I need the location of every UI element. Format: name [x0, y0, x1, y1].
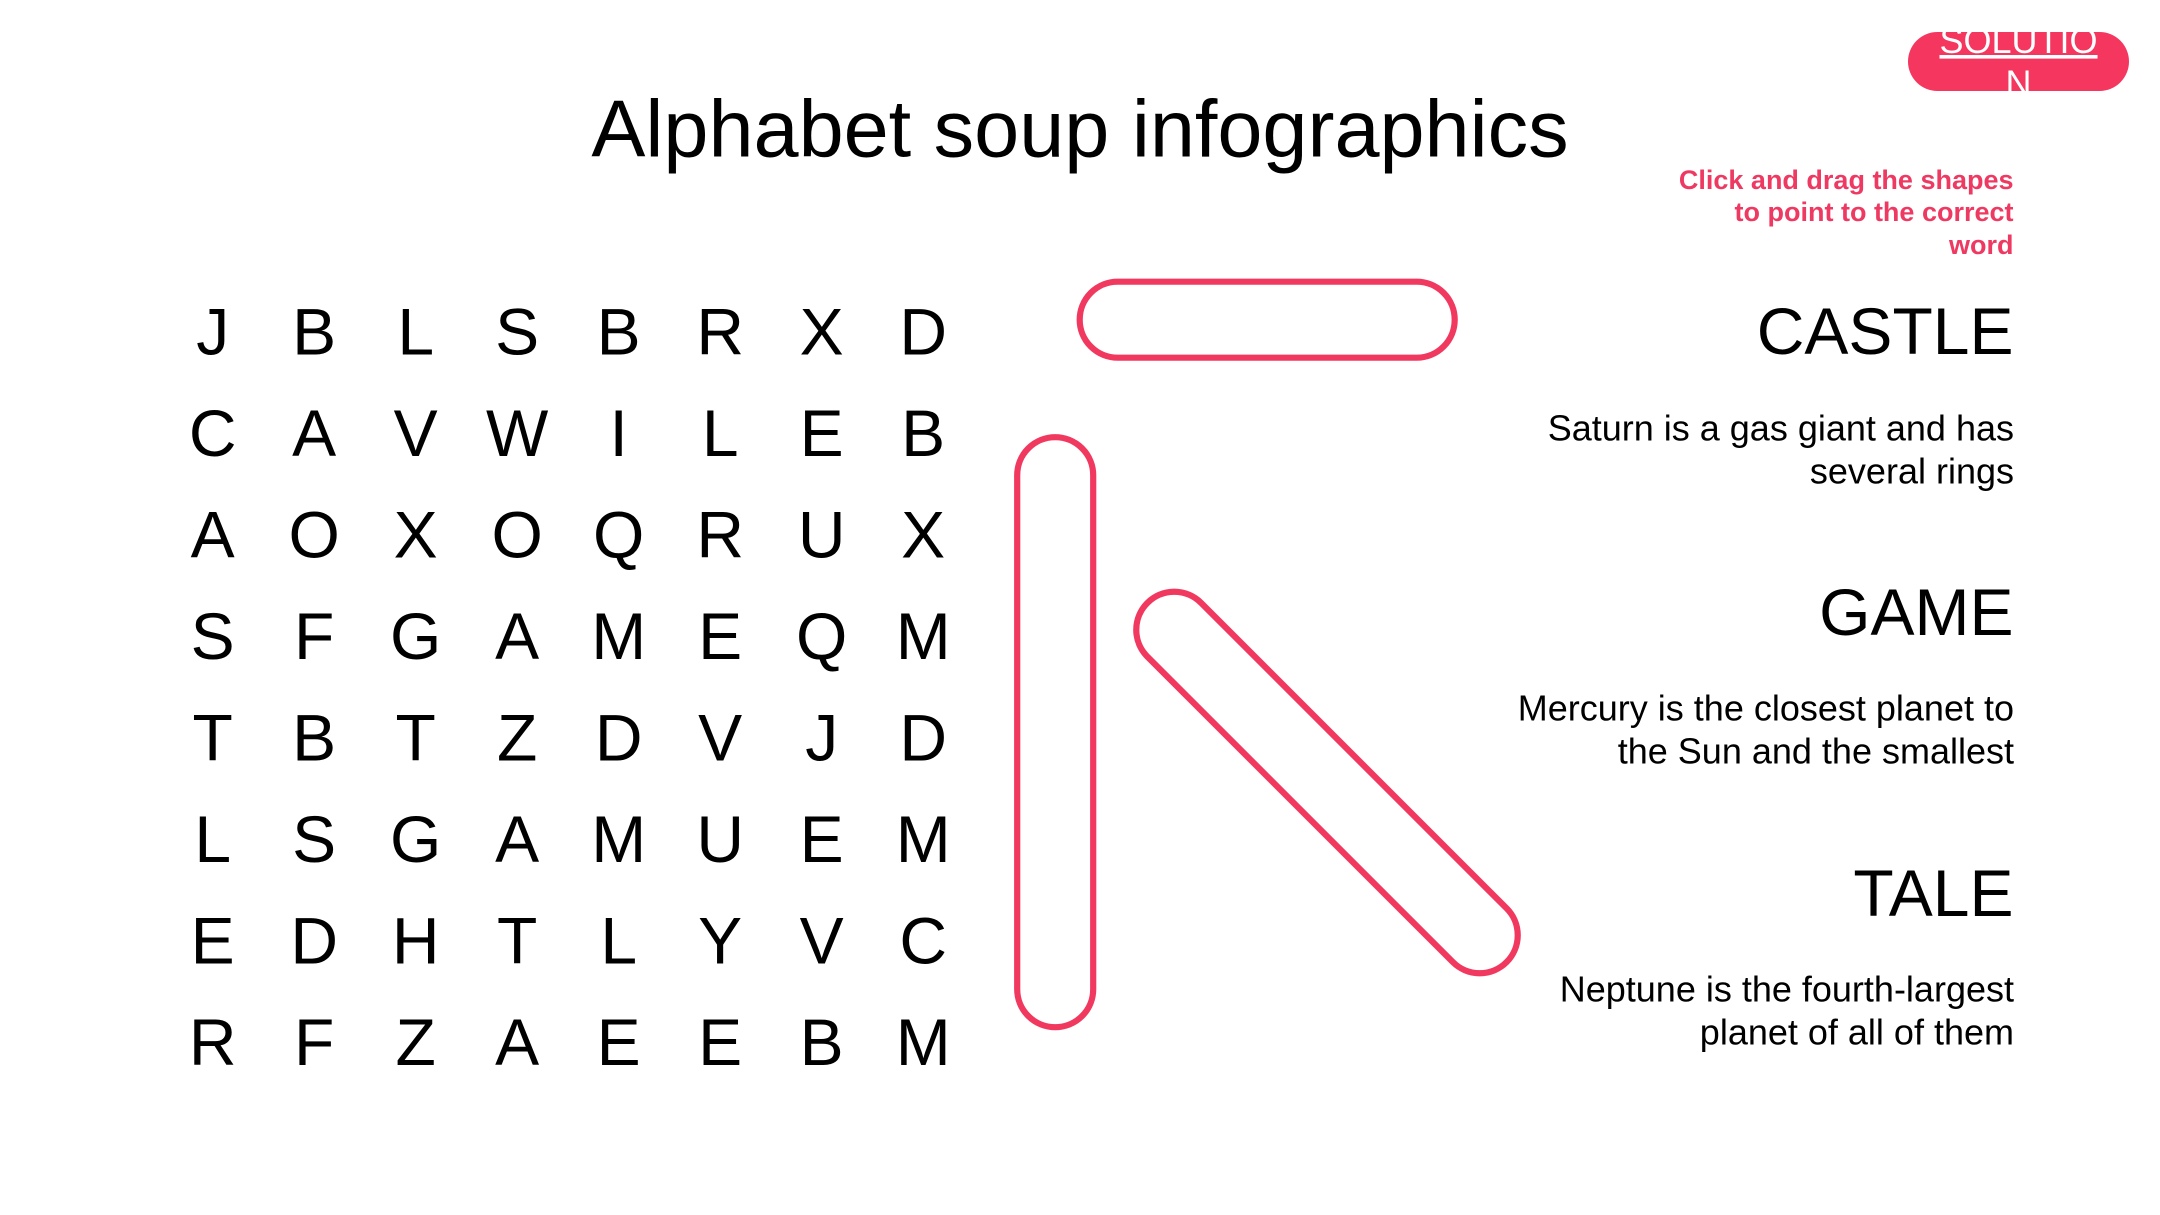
- instruction text: Click and drag the shapes: [1679, 165, 2014, 195]
- word block: castle: several rings: [1810, 450, 2014, 492]
- grid row 6: M: [591, 802, 646, 876]
- grid row 5: B: [292, 701, 336, 775]
- grid row 4: G: [390, 599, 441, 673]
- grid row 2: B: [901, 396, 945, 470]
- grid row 1: B: [292, 295, 336, 369]
- grid row 2: C: [189, 396, 237, 470]
- word block: tale: TALE: [1853, 856, 2014, 930]
- grid row 7: E: [191, 904, 235, 978]
- grid row 4: F: [294, 599, 334, 673]
- grid row 6: A: [495, 802, 539, 876]
- grid row 4: M: [591, 599, 646, 673]
- grid row 1: X: [800, 295, 844, 369]
- grid row 8: Z: [396, 1005, 436, 1079]
- grid row 3: O: [492, 498, 543, 572]
- word block: tale: [1560, 856, 2014, 1052]
- grid row 3: O: [289, 498, 340, 572]
- grid row 1: [196, 295, 947, 369]
- solution button: N: [2006, 62, 2032, 104]
- grid row 8: F: [294, 1005, 334, 1079]
- word block: game: GAME: [1819, 575, 2014, 649]
- grid row 6: M: [896, 802, 951, 876]
- grid row 5: Z: [497, 701, 537, 775]
- grid row 6: [194, 802, 951, 876]
- grid row 1: R: [696, 295, 744, 369]
- instruction text: [1679, 165, 2014, 260]
- instruction text: word: [1948, 230, 2014, 260]
- grid row 1: L: [397, 295, 434, 369]
- grid row 7: [191, 904, 947, 978]
- grid row 2: V: [394, 396, 438, 470]
- grid row 8: [189, 1005, 951, 1079]
- grid row 4: E: [698, 599, 742, 673]
- word block: tale: planet of all of them: [1700, 1012, 2014, 1052]
- grid row 6: G: [390, 802, 441, 876]
- grid row 1: J: [196, 295, 229, 369]
- horizontal pill shape: [1080, 282, 1455, 358]
- grid row 3: Q: [593, 498, 644, 572]
- grid row 5: V: [698, 701, 742, 775]
- grid row 1: S: [495, 295, 539, 369]
- grid row 4: A: [495, 599, 539, 673]
- grid row 2: L: [702, 396, 739, 470]
- instruction text: to point to the correct: [1734, 197, 2014, 227]
- grid row 7: H: [392, 904, 440, 978]
- word block: castle: Saturn is a gas giant and has: [1548, 408, 2014, 448]
- grid row 7: Y: [698, 904, 742, 978]
- letter grid: [189, 295, 951, 1079]
- grid row 5: D: [899, 701, 947, 775]
- grid row 7: V: [800, 904, 844, 978]
- grid row 5: [193, 701, 947, 775]
- grid row 7: D: [290, 904, 338, 978]
- grid row 2: E: [800, 396, 844, 470]
- grid row 3: U: [798, 498, 846, 572]
- word block: castle: [1548, 294, 2014, 492]
- title: Alphabet soup infographics: [591, 84, 1569, 174]
- grid row 6: U: [696, 802, 744, 876]
- grid row 4: S: [191, 599, 235, 673]
- grid row 5: D: [595, 701, 643, 775]
- grid row 4: M: [896, 599, 951, 673]
- grid row 3: R: [696, 498, 744, 572]
- grid row 8: E: [698, 1005, 742, 1079]
- grid row 1: D: [899, 295, 947, 369]
- grid row 4: [191, 599, 951, 673]
- word block: game: [1518, 575, 2014, 772]
- solution button: SOLUTIO: [1939, 20, 2098, 61]
- grid row 8: M: [896, 1005, 951, 1079]
- grid row 8: E: [597, 1005, 641, 1079]
- grid row 1: B: [597, 295, 641, 369]
- word block: game: Mercury is the closest planet to: [1518, 688, 2014, 728]
- grid row 5: T: [396, 701, 436, 775]
- grid row 6: L: [194, 802, 231, 876]
- grid row 6: S: [292, 802, 336, 876]
- grid row 3: [191, 498, 945, 572]
- grid row 5: T: [193, 701, 233, 775]
- grid row 4: Q: [796, 599, 847, 673]
- grid row 3: A: [191, 498, 235, 572]
- grid row 7: T: [497, 904, 537, 978]
- grid row 2: [189, 396, 945, 470]
- word block: castle: CASTLE: [1757, 294, 2014, 368]
- word block: game: the Sun and the smallest: [1618, 730, 2014, 772]
- word block: tale: Neptune is the fourth-largest: [1560, 968, 2014, 1010]
- grid row 3: X: [394, 498, 438, 572]
- grid row 2: I: [610, 396, 628, 470]
- grid row 7: L: [600, 904, 637, 978]
- grid row 2: A: [292, 396, 336, 470]
- grid row 8: B: [800, 1005, 844, 1079]
- grid row 6: E: [800, 802, 844, 876]
- grid row 5: J: [805, 701, 838, 775]
- grid row 8: A: [495, 1005, 539, 1079]
- diagonal pill shape: [1121, 576, 1533, 989]
- vertical pill shape: [1017, 437, 1093, 1027]
- grid row 3: X: [901, 498, 945, 572]
- solution button: [1908, 32, 2129, 91]
- grid row 8: R: [189, 1005, 237, 1079]
- grid row 2: W: [486, 396, 549, 470]
- grid row 7: C: [899, 904, 947, 978]
